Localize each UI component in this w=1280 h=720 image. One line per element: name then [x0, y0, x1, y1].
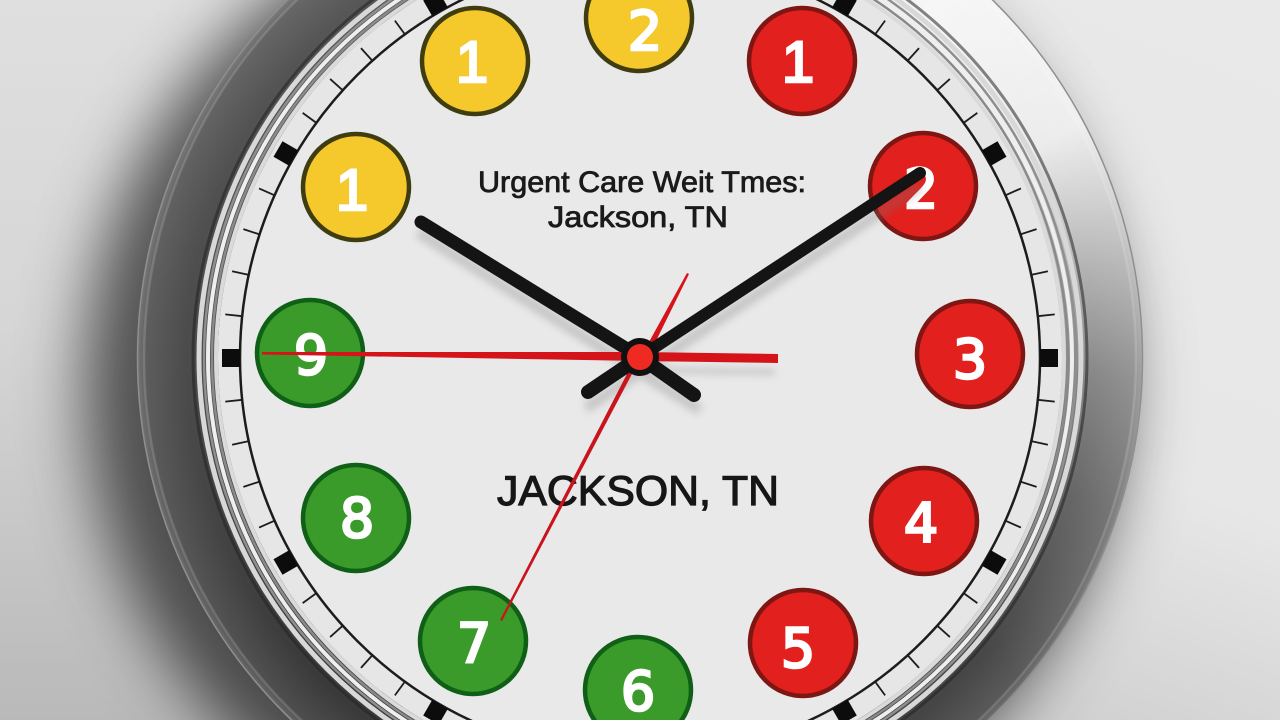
marker: yellow 1 left	[303, 134, 409, 240]
right wall tone	[640, 0, 1280, 720]
marker: yellow 1 upper left: 1	[456, 30, 488, 95]
marker: yellow 1 upper left	[422, 8, 528, 114]
inner chrome rings	[199, 0, 1081, 720]
bezel highlight	[137, 0, 1143, 720]
minute track	[222, 0, 1058, 720]
marker: red 2	[870, 133, 976, 239]
marker: green 6	[585, 637, 691, 720]
marker: green 7	[420, 588, 526, 694]
inner face	[242, 0, 1038, 720]
marker: red 1	[749, 8, 855, 114]
marker: red 1: 1	[782, 30, 814, 95]
label: city: JACKSON, TN	[497, 467, 779, 514]
marker: yellow 2 top: 2	[628, 0, 662, 63]
hand shadows	[418, 186, 920, 410]
marker: red 5: 5	[781, 617, 815, 680]
marker: yellow 1 left: 1	[336, 158, 368, 223]
red second hand, long	[500, 273, 689, 621]
red sweep hand	[262, 352, 778, 363]
marker: green 7: 7	[457, 612, 491, 675]
marker: red 4	[871, 468, 977, 574]
marker: green 9	[257, 300, 363, 406]
heading: title: Urgent Care Weit Tmes:	[478, 166, 806, 199]
marker: red 3: 3	[953, 328, 987, 391]
marker: green 8: 8	[340, 487, 374, 550]
center hub	[621, 338, 659, 376]
dial face	[218, 0, 1062, 720]
marker: red 4: 4	[904, 492, 938, 555]
heading: location: Jackson, TN	[548, 201, 728, 234]
marker: red 3	[917, 301, 1023, 407]
marker: red 2: 2	[904, 158, 938, 221]
marker: yellow 2 top	[586, 0, 692, 71]
marker: red 5	[750, 590, 856, 696]
hour hand	[421, 222, 694, 395]
marker: green 9: 9	[294, 324, 328, 387]
minute hand	[588, 173, 920, 392]
marker: green 8	[303, 465, 409, 571]
clock bezel	[137, 0, 1143, 720]
